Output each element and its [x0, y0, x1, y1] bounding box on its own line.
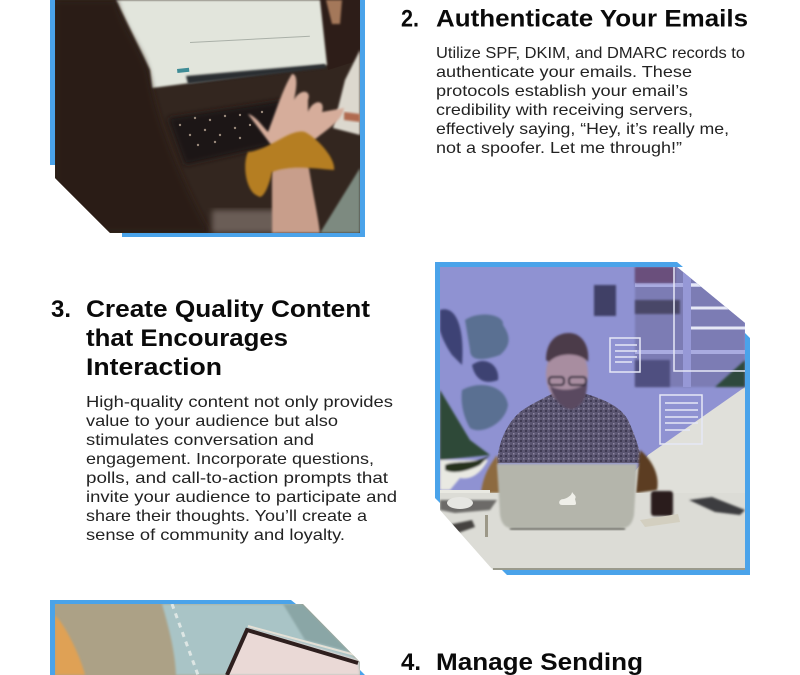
photo 1: woman typing on a laptop — [50, 0, 365, 237]
desk — [440, 493, 646, 567]
photo 3 blue frame — [50, 600, 365, 675]
text block: authenticate your emails: credibility with receiving servers, — [436, 102, 693, 119]
heading: 3. Create Quality Content that Encourages Interaction: 3. — [51, 296, 71, 323]
man — [481, 333, 658, 493]
shelves — [635, 267, 745, 387]
text block: quality content: share their thoughts. You’ll create a — [86, 508, 367, 525]
text block: authenticate your emails: protocols establish your email’s — [436, 83, 688, 100]
photo 2: man working on a laptop — [435, 262, 750, 575]
photo 1 image — [55, 0, 360, 233]
heading: 3. Create Quality Content that Encourages Interaction: Create Quality Content — [86, 296, 370, 323]
photo 2 blue frame — [435, 262, 750, 575]
text block: quality content: stimulates conversation and — [86, 432, 314, 449]
photo 3: laptop on lap — [50, 600, 365, 675]
floating document icons — [610, 267, 745, 444]
text block: quality content: polls, and call-to-action prompts that — [86, 470, 389, 487]
heading: 3. Create Quality Content that Encourages Interaction: that Encourages — [86, 325, 288, 352]
heading: 2. Authenticate Your Emails: Authenticate Your Emails — [436, 6, 748, 32]
heading: 3. Create Quality Content that Encourages Interaction: Interaction — [86, 354, 222, 381]
heading: 3. Create Quality Content that Encourages Interaction — [51, 296, 370, 381]
text block: quality content: value to your audience but also — [86, 413, 338, 430]
text block: quality content: High-quality content not only provides — [86, 394, 393, 411]
mouse and pad — [440, 500, 497, 513]
text block: authenticate your emails — [436, 45, 745, 157]
text block: quality content: invite your audience to participate and — [86, 489, 397, 506]
photo 3 image — [55, 604, 360, 675]
text block: authenticate your emails: not a spoofer. Let me through!” — [436, 140, 682, 157]
text block: quality content: engagement. Incorporate questions, — [86, 451, 374, 468]
text block: authenticate your emails: Utilize SPF, DKIM, and DMARC records to — [436, 45, 745, 62]
heading: 2. Authenticate Your Emails: 2. — [401, 6, 419, 32]
photo 2 image — [440, 267, 745, 570]
text block: authenticate your emails: effectively saying, “Hey, it’s really me, — [436, 121, 729, 138]
coffee mug — [651, 491, 673, 516]
text block: quality content: sense of community and loyalty. — [86, 527, 345, 544]
photo 1 blue frame — [50, 0, 365, 237]
plant — [440, 309, 509, 490]
laptop — [497, 464, 637, 529]
text block: quality content — [86, 394, 397, 544]
text block: authenticate your emails: authenticate your emails. These — [436, 64, 692, 81]
